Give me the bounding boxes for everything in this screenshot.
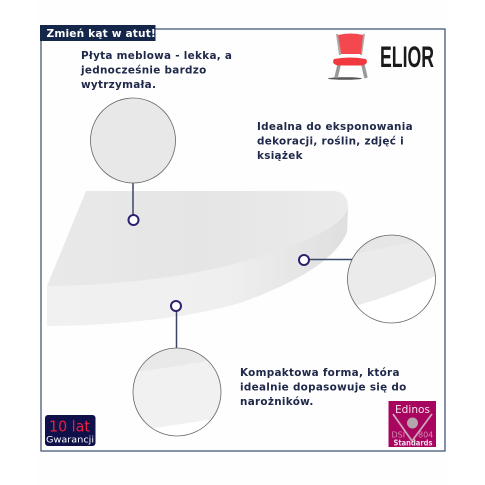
- logo: Elior: [328, 34, 434, 80]
- badge: Edinos standards: Standards: [394, 438, 433, 448]
- text block: compact form: narożników.: [240, 396, 314, 408]
- badge: 10 years warranty: 10 lat: [49, 418, 90, 436]
- text block: display use: książek: [257, 150, 304, 162]
- badge: Edinos standards: 804: [418, 430, 433, 440]
- shelf illustration: [47, 191, 348, 326]
- outer frame: [41, 29, 445, 451]
- icon: red chair: [328, 34, 367, 80]
- badge: 10 years warranty: Gwarancji: [46, 436, 94, 446]
- header badge: Zmień kąt w atut!: [46, 28, 156, 40]
- text block: lightweight board: jednocześnie bardzo: [80, 64, 207, 76]
- callout: right circle: [299, 230, 440, 323]
- callout: bottom circle: [130, 301, 225, 436]
- badge: 10 years warranty: [45, 415, 96, 446]
- text block: lightweight board: Płyta meblowa - lekka, a: [81, 50, 232, 62]
- badge: Edinos standards: DSI: [392, 430, 405, 440]
- text block: display use: dekoracji, roślin, zdjęć i: [257, 136, 404, 148]
- badge: Edinos standards: Edinos: [395, 404, 430, 416]
- logo wordmark: ELIOR: [380, 41, 434, 74]
- text block: compact form: Kompaktowa forma, która: [240, 367, 400, 379]
- callout: top circle: [90, 98, 176, 225]
- badge: Edinos standards: [388, 401, 436, 448]
- text block: compact form: idealnie dopasowuje się do: [240, 382, 407, 394]
- text block: lightweight board: wytrzymała.: [81, 79, 156, 91]
- text block: display use: Idealna do eksponowania: [257, 121, 413, 133]
